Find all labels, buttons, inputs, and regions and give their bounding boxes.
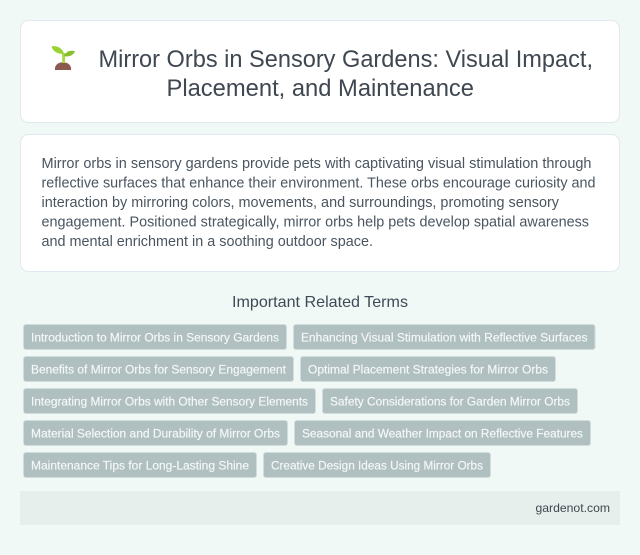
tag: Seasonal and Weather Impact on Reflective Features — [302, 426, 583, 440]
tag — [24, 388, 316, 414]
tag — [294, 324, 595, 350]
tag: Material Selection and Durability of Mirror Orbs — [31, 426, 280, 440]
footer — [20, 491, 620, 525]
tag: Integrating Mirror Orbs with Other Sensory Elements — [31, 394, 308, 408]
tag — [24, 324, 286, 350]
text block: summary paragraph — [42, 156, 596, 250]
text block: summary paragraph: reflective surfaces that enhance their environment. These orbs encourage curiosity and — [42, 176, 596, 192]
footer credit: gardenot.com — [536, 501, 610, 515]
tag — [300, 356, 556, 382]
panel: summary — [20, 134, 620, 272]
tag — [264, 452, 490, 478]
text block: summary paragraph: Mirror orbs in sensory gardens provide pets with captivating visual stimulation through — [42, 156, 592, 172]
panel: header — [20, 20, 620, 122]
tag: Enhancing Visual Stimulation with Reflective Surfaces — [301, 330, 588, 344]
tag: Creative Design Ideas Using Mirror Orbs — [271, 458, 483, 472]
tag: Introduction to Mirror Orbs in Sensory Gardens — [31, 330, 279, 344]
tag: Safety Considerations for Garden Mirror Orbs — [330, 394, 570, 408]
tag: Optimal Placement Strategies for Mirror Orbs — [308, 362, 548, 376]
text block: summary paragraph: interaction by mirroring colors, movements, and surroundings, promoting sensory — [42, 195, 560, 211]
title: Mirror Orbs in Sensory Gardens: Visual Impact, — [98, 46, 593, 73]
tag list — [24, 324, 595, 478]
tag — [294, 420, 590, 446]
heading: related terms: Important Related Terms — [232, 294, 408, 311]
tag — [24, 452, 256, 478]
title — [98, 46, 593, 102]
tag: Benefits of Mirror Orbs for Sensory Engagement — [31, 362, 287, 376]
tag — [24, 356, 294, 382]
tag: Maintenance Tips for Long-Lasting Shine — [31, 458, 249, 472]
tag — [24, 420, 288, 446]
icon: sprout — [52, 46, 75, 70]
title: Placement, and Maintenance — [166, 75, 474, 102]
text block: summary paragraph: and mental enrichment in a soothing outdoor space. — [42, 234, 373, 250]
text block: summary paragraph: engagement. Positioned strategically, mirror orbs help pets develop spatial awareness — [42, 214, 589, 230]
tag — [322, 388, 578, 414]
